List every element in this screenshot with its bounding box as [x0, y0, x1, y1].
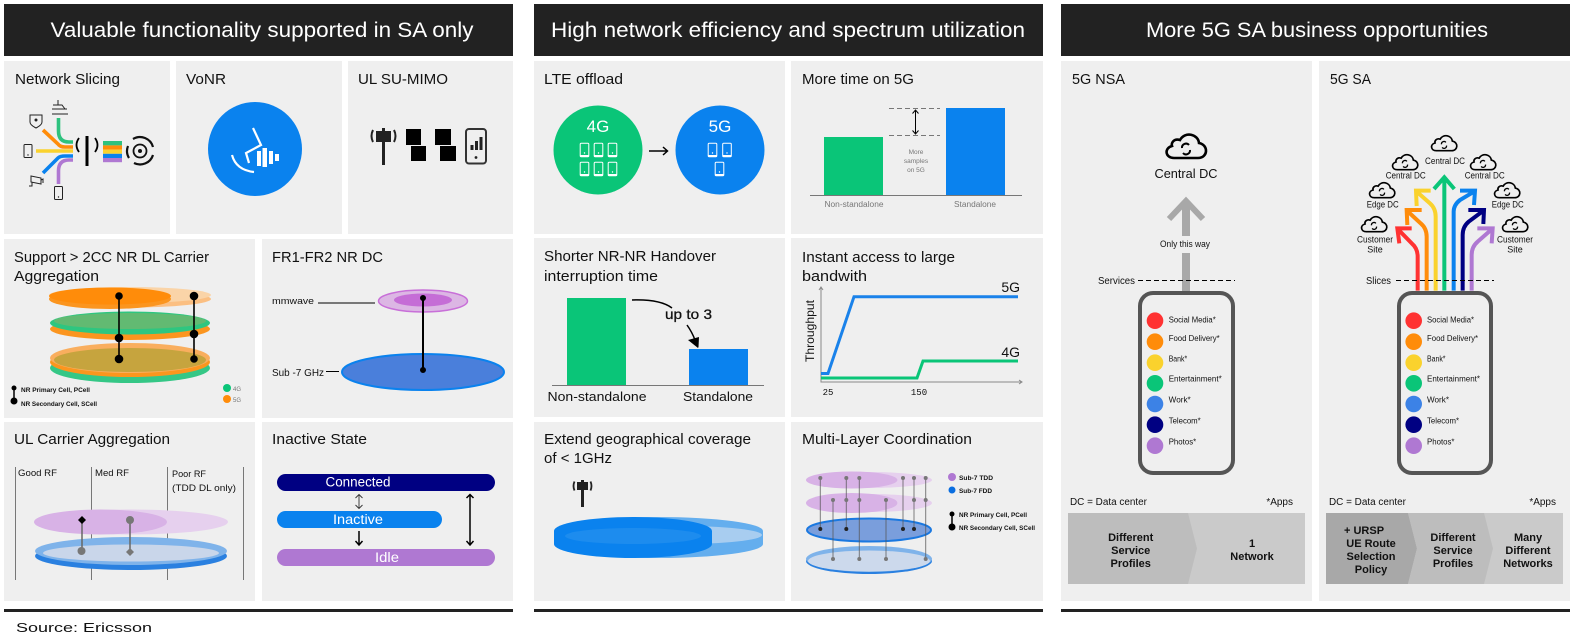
- state: idle: [277, 549, 495, 566]
- state: idle: Idle: [375, 550, 399, 565]
- legend: bands: 4G: [233, 387, 241, 393]
- legend: bands: Sub-7 FDD: [959, 489, 993, 495]
- legend: cells: NR Secondary Cell, SCell: [21, 402, 97, 408]
- app labels: Bank*: [1427, 355, 1446, 364]
- slice lines: [36, 118, 73, 184]
- top cell layer: [49, 287, 211, 309]
- sub-7 disc: [342, 354, 504, 390]
- heading: Multi-Layer Coordination: [802, 431, 972, 448]
- panel: More time on 5G: [791, 61, 1043, 234]
- heading: Network Slicing: [15, 71, 120, 88]
- chevrons: policy, profiles, networks: Networks: [1503, 558, 1553, 570]
- app labels: [1169, 316, 1222, 447]
- panel: Coverage: [534, 422, 785, 601]
- app labels: Entertainment*: [1169, 375, 1222, 384]
- x axis ticks: 150: [911, 388, 927, 398]
- chevrons: policy, profiles, networks: Different: [1505, 545, 1551, 557]
- footnotes: *Apps: [1529, 497, 1556, 508]
- panel: LTE offload: [534, 61, 785, 234]
- legend: bands: Sub-7 TDD: [959, 476, 994, 482]
- mmwave disc: [378, 290, 468, 312]
- destination labels: Central DC: [1465, 171, 1505, 181]
- slice arrows: [1397, 177, 1493, 291]
- y axis title: Throughput: [803, 299, 817, 362]
- destination labels: Customer: [1357, 235, 1393, 245]
- callout: [632, 300, 712, 348]
- icon: voice circle: [208, 102, 302, 196]
- app labels: Work*: [1169, 396, 1191, 405]
- UL cell links: [78, 516, 134, 556]
- bar labels: Non-standalone: [548, 389, 646, 404]
- heading: VoNR: [186, 71, 226, 88]
- note: More: [909, 149, 924, 156]
- 5G circle: 5G: [709, 117, 731, 136]
- panel: UL Carrier Aggregation: [4, 422, 255, 601]
- column header: efficiency: [534, 4, 1043, 56]
- label only this way: Only this way: [1160, 239, 1210, 249]
- panel: 5G NSA: [1061, 61, 1312, 601]
- destination labels: Edge DC: [1367, 200, 1399, 210]
- arrow inactive-idle: [356, 531, 362, 545]
- icon: phone bottom: [54, 186, 62, 200]
- state: connected: [277, 474, 495, 491]
- heading: Inactive State: [272, 431, 367, 448]
- bar: SA: [689, 349, 748, 385]
- panel: UL SU-MIMO: [348, 61, 513, 234]
- legend: cells: [10, 386, 97, 408]
- heading: Extend geographical coverage: [544, 431, 751, 448]
- heading: LTE offload: [544, 71, 623, 88]
- icon: device: [466, 129, 486, 164]
- destination labels: Customer: [1497, 235, 1533, 245]
- chevrons: policy, profiles, networks: Service: [1433, 545, 1473, 557]
- line labels: 5G: [1001, 279, 1020, 295]
- column header: business: More 5G SA business opportunities: [1146, 19, 1488, 42]
- bar labels: Standalone: [683, 389, 753, 404]
- heading: UL Carrier Aggregation: [14, 431, 170, 448]
- panel: FR1-FR2: [262, 239, 513, 418]
- app labels: Entertainment*: [1427, 375, 1480, 384]
- destination labels: Central DC: [1425, 156, 1465, 166]
- heading line 2: bandwith: [802, 268, 867, 285]
- note: [904, 149, 929, 174]
- panel: Handover: [534, 238, 785, 417]
- heading: 5G NSA: [1072, 71, 1125, 88]
- panel: Instant access: [791, 238, 1043, 417]
- RF zones: Poor RF: [172, 469, 206, 480]
- chevrons: policy, profiles, networks: Different: [1430, 532, 1476, 544]
- heading: More time on 5G: [802, 71, 914, 88]
- panel: Network Slicing: [4, 61, 170, 234]
- arrow connected-inactive: [356, 494, 362, 508]
- footnotes: [1329, 497, 1556, 508]
- single path arrow: [1169, 201, 1203, 291]
- panel: Carrier Aggregation: [4, 239, 255, 418]
- x axis ticks: 25: [823, 388, 833, 398]
- slices divider: [1366, 276, 1494, 287]
- axis and gap: [810, 108, 1022, 196]
- legend: cells: NR Primary Cell, PCell: [21, 388, 90, 394]
- panel: Inactive State: [262, 422, 513, 601]
- note: on 5G: [907, 167, 925, 174]
- app labels: Telecom*: [1169, 417, 1201, 426]
- services divider: Services: [1098, 276, 1135, 287]
- UL discs purple: [34, 510, 228, 534]
- links: [818, 476, 928, 561]
- heading: FR1-FR2 NR DC: [272, 249, 383, 266]
- label mmwave: mmwave: [272, 296, 314, 306]
- legend: bands: 5G: [233, 398, 241, 404]
- icon: shield: [30, 115, 42, 128]
- RF zones: [16, 467, 244, 580]
- legend: bands: [948, 473, 994, 495]
- column header: functionality: [4, 4, 513, 56]
- bar: standalone: [946, 108, 1005, 195]
- state: connected: Connected: [326, 474, 390, 490]
- chevrons: policy, profiles, networks: [1326, 513, 1563, 584]
- RF zones: Med RF: [95, 468, 129, 479]
- column header: functionality: Valuable functionality supported in SA only: [50, 19, 474, 42]
- bottom rules: [4, 609, 1570, 612]
- services divider: [1098, 276, 1235, 287]
- icon: antenna: [372, 128, 396, 165]
- bottom cell layer: [50, 343, 210, 383]
- middle cell layer: [50, 312, 210, 340]
- app labels: Photos*: [1169, 438, 1196, 447]
- heading line 2: of < 1GHz: [544, 450, 612, 467]
- app labels: Bank*: [1169, 355, 1187, 364]
- line 5G: [821, 297, 1018, 374]
- column header: efficiency: High network efficiency and spectrum utilization: [551, 19, 1025, 42]
- chevrons: policy, profiles, networks: UE Route: [1346, 538, 1396, 550]
- label mmwave: [272, 296, 375, 306]
- line labels: [1001, 279, 1020, 360]
- destination labels: Site: [1507, 245, 1523, 255]
- footnotes: DC = Data center: [1329, 497, 1407, 508]
- app dots: [1147, 312, 1163, 454]
- arrow connected-idle: [466, 494, 474, 545]
- phone with apps: [1140, 293, 1233, 473]
- 4G circle: 4G: [587, 117, 609, 136]
- legend: cells: [948, 512, 1035, 532]
- panel: 5G SA: [1319, 61, 1570, 601]
- footnotes: *Apps: [1266, 497, 1293, 508]
- panel: VoNR: [176, 61, 342, 234]
- antenna: [76, 136, 98, 166]
- heading: UL SU-MIMO: [358, 71, 448, 88]
- RF zones: (TDD DL only): [172, 483, 236, 494]
- chevron: profiles to network: Profiles: [1111, 558, 1151, 570]
- app dots: [1405, 312, 1422, 454]
- chevron: profiles to network: Different: [1108, 532, 1154, 544]
- axis labels: Standalone: [954, 200, 997, 209]
- state: inactive: Inactive: [333, 512, 383, 527]
- cell links: [116, 292, 198, 362]
- slice stack: [103, 141, 122, 162]
- MIMO layers: [406, 129, 456, 161]
- icon: antenna: [574, 480, 592, 507]
- heading: Shorter NR-NR Handover: [544, 248, 716, 265]
- icon: core target: [127, 137, 153, 164]
- chevrons: policy, profiles, networks: Selection: [1347, 551, 1396, 563]
- 4G circle: [554, 106, 642, 194]
- footnotes: [1070, 497, 1293, 508]
- chevrons: policy, profiles, networks: Profiles: [1433, 558, 1473, 570]
- heading: Support > 2CC NR DL Carrier: [14, 249, 209, 266]
- label central DC: Central DC: [1154, 167, 1218, 181]
- app labels: [1427, 316, 1480, 447]
- chevrons: policy, profiles, networks: + URSP: [1344, 525, 1384, 537]
- app labels: Social Media*: [1169, 316, 1216, 325]
- footnotes: DC = Data center: [1070, 497, 1148, 508]
- destination labels: Site: [1367, 245, 1383, 255]
- line 4G: [821, 361, 1018, 378]
- note: samples: [904, 158, 929, 165]
- source: Source: Ericsson: [16, 620, 152, 635]
- chevron: profiles to network: Service: [1111, 545, 1150, 557]
- heading: 5G SA: [1330, 71, 1371, 88]
- link: [420, 296, 426, 372]
- panel: Multi-Layer: [791, 422, 1043, 601]
- legend: cells: NR Secondary Cell, SCell: [959, 526, 1035, 532]
- heading line 2: interruption time: [544, 268, 658, 285]
- slices divider: Slices: [1366, 276, 1391, 287]
- heading: Instant access to large: [802, 249, 955, 266]
- app labels: Social Media*: [1427, 316, 1474, 325]
- app labels: Photos*: [1427, 438, 1454, 447]
- app labels: Food Delivery*: [1169, 334, 1220, 343]
- lower FDD layer: [806, 546, 932, 574]
- FDD layer: [807, 518, 931, 542]
- destination labels: Central DC: [1386, 171, 1426, 181]
- heading line 2: Aggregation: [14, 268, 99, 285]
- axes: [819, 287, 1022, 384]
- x axis ticks: [823, 388, 927, 398]
- state: inactive: [277, 511, 442, 528]
- phone with apps: [1399, 293, 1491, 473]
- purple layers: [806, 472, 932, 513]
- app labels: Food Delivery*: [1427, 334, 1478, 343]
- chevron: profiles to network: Network: [1230, 551, 1275, 563]
- icon: phone left: [24, 144, 32, 158]
- coverage solid disc: [554, 517, 712, 558]
- bar labels: [548, 389, 753, 404]
- UL discs blue: [35, 537, 227, 570]
- RF zones: Good RF: [18, 468, 57, 479]
- line labels: 4G: [1001, 344, 1020, 360]
- bar: non-standalone: [824, 137, 883, 195]
- destination labels: Edge DC: [1492, 200, 1524, 210]
- app labels: Telecom*: [1427, 417, 1459, 426]
- chevrons: policy, profiles, networks: Policy: [1355, 564, 1388, 576]
- label sub-7: Sub -7 GHz: [272, 368, 324, 379]
- icon: camera: [29, 176, 43, 186]
- arrow: [649, 147, 668, 155]
- destination labels: [1357, 156, 1533, 255]
- icon: cloud: [1167, 135, 1206, 158]
- axis: [552, 384, 764, 386]
- callout: up to 3: [665, 306, 712, 322]
- axis labels: [824, 200, 997, 209]
- legend: cells: NR Primary Cell, PCell: [959, 513, 1027, 519]
- axis labels: Non-standalone: [824, 200, 884, 209]
- chevron: profiles to network: [1068, 513, 1305, 584]
- chevron: profiles to network: 1: [1249, 538, 1255, 550]
- chevrons: policy, profiles, networks: Many: [1514, 532, 1543, 544]
- column header: business: [1061, 4, 1570, 56]
- bar: NSA: [567, 298, 626, 385]
- coverage light disc: [554, 517, 763, 558]
- icon: clouds: [1362, 136, 1528, 232]
- app labels: Work*: [1427, 396, 1449, 405]
- 5G circle: [676, 106, 764, 194]
- legend: bands: [223, 384, 241, 404]
- icon: ship: [52, 100, 68, 114]
